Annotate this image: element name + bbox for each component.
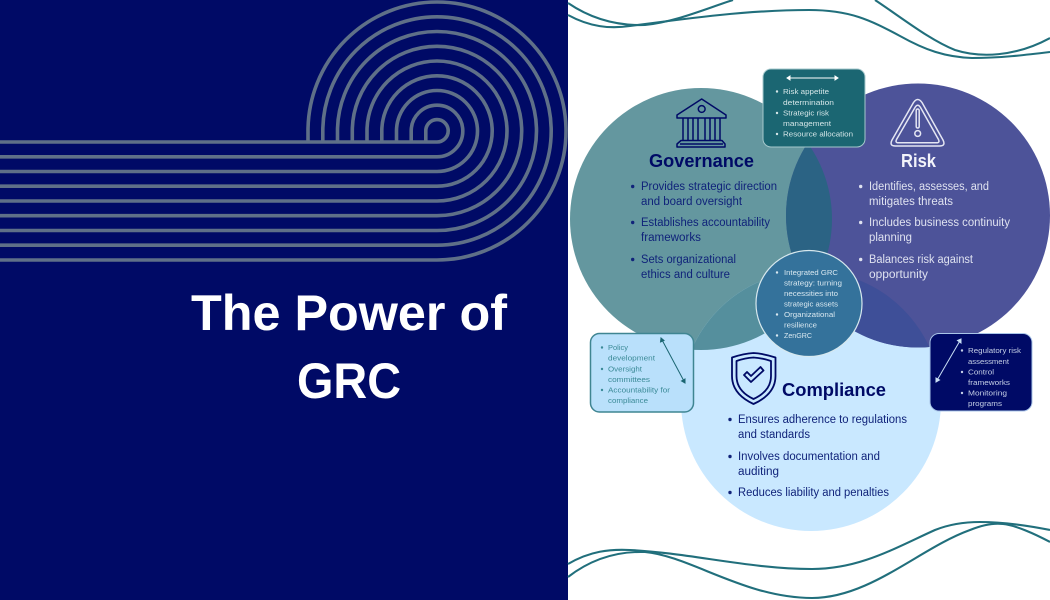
callout: governance and compliance overlap xyxy=(590,334,694,412)
list: governance and risk points: management xyxy=(783,119,832,128)
overlap: risk and compliance xyxy=(854,280,929,348)
list: governance points: Sets organizational xyxy=(641,254,736,266)
list: integrated GRC points: Integrated GRC xyxy=(784,268,839,277)
decorative top waves xyxy=(568,0,1050,58)
list: governance and risk points xyxy=(776,87,853,138)
icon: governance building xyxy=(677,99,726,147)
list: governance and compliance points: compliance xyxy=(608,396,648,405)
callout: governance and risk overlap xyxy=(763,69,865,147)
list: integrated GRC points: strategic assets xyxy=(784,300,838,308)
list: governance and risk points: determination xyxy=(783,98,834,107)
callout: risk and compliance overlap xyxy=(930,334,1032,411)
list: governance and compliance points: development xyxy=(608,354,656,363)
list: compliance points: Ensures adherence to regulations xyxy=(738,414,907,426)
list: integrated GRC points: ZenGRC xyxy=(784,331,813,340)
list: risk and compliance points: assessment xyxy=(968,357,1010,366)
center circle: integrated GRC xyxy=(756,250,862,356)
list: governance points: ethics and culture xyxy=(641,269,730,281)
list: governance and risk points: Resource allocation xyxy=(783,130,853,138)
list: governance points: Provides strategic direction xyxy=(641,181,777,193)
list: risk and compliance points: Monitoring xyxy=(968,388,1007,398)
decorative bottom waves xyxy=(568,522,1050,598)
list: governance and compliance points: Policy xyxy=(608,343,628,352)
list: compliance points xyxy=(728,414,907,499)
list: governance and risk points: Strategic risk xyxy=(783,108,829,118)
overlap: governance and risk xyxy=(786,148,832,253)
arrow: double-headed horizontal xyxy=(787,76,838,80)
list: risk points: Identifies, assesses, and xyxy=(869,181,989,193)
list: integrated GRC points: resilience xyxy=(784,320,817,330)
list: compliance points: Involves documentation and xyxy=(738,451,880,463)
title: The Power of xyxy=(191,285,507,341)
list: risk points: opportunity xyxy=(869,269,928,281)
list: governance and compliance points: Accountability for xyxy=(608,386,671,394)
title: GRC xyxy=(297,353,401,409)
list: risk points: Balances risk against xyxy=(869,254,974,266)
icon: risk warning triangle xyxy=(891,100,944,146)
list: governance points: frameworks xyxy=(641,232,701,244)
concentric line pattern xyxy=(0,2,566,260)
circle: risk xyxy=(786,84,1050,348)
list: risk and compliance points: frameworks xyxy=(968,378,1010,387)
list: risk points: mitigates threats xyxy=(869,196,953,208)
list: governance points: and board oversight xyxy=(641,196,743,208)
list: compliance points: auditing xyxy=(738,466,779,478)
heading: governance: Governance xyxy=(649,151,754,171)
heading: compliance: Compliance xyxy=(782,380,886,400)
list: governance points xyxy=(631,181,777,281)
list: integrated GRC points xyxy=(776,268,842,340)
list: compliance points: Reduces liability and penalties xyxy=(738,487,889,499)
list: risk points: Includes business continuity xyxy=(869,217,1010,229)
list: compliance points: and standards xyxy=(738,429,810,441)
list: risk and compliance points xyxy=(961,346,1021,408)
title xyxy=(191,285,507,409)
list: risk and compliance points: Regulatory risk xyxy=(968,346,1021,355)
circle: compliance xyxy=(681,271,941,531)
icon: compliance shield xyxy=(732,353,776,404)
circle: governance xyxy=(570,88,832,350)
panel: left navy background xyxy=(0,0,568,600)
list: governance and compliance points xyxy=(601,343,671,405)
list: governance and risk points: Risk appetite xyxy=(783,87,829,96)
list: governance and compliance points: Oversight xyxy=(608,364,643,374)
list: risk points xyxy=(859,181,1010,281)
list: risk points: planning xyxy=(869,232,912,244)
arrow: double-headed diagonal xyxy=(936,339,961,382)
list: risk and compliance points: Control xyxy=(968,368,994,376)
arrow: double-headed diagonal xyxy=(660,338,685,383)
heading: risk: Risk xyxy=(901,151,937,171)
list: integrated GRC points: necessities into xyxy=(784,289,838,298)
list: governance points: Establishes accountability xyxy=(641,217,770,229)
list: risk and compliance points: programs xyxy=(968,399,1002,408)
list: integrated GRC points: Organizational xyxy=(784,310,835,319)
list: governance and compliance points: committees xyxy=(608,375,650,384)
list: integrated GRC points: strategy: turning xyxy=(784,278,842,288)
venn diagram xyxy=(570,84,1050,531)
overlap: governance and compliance xyxy=(694,281,764,350)
